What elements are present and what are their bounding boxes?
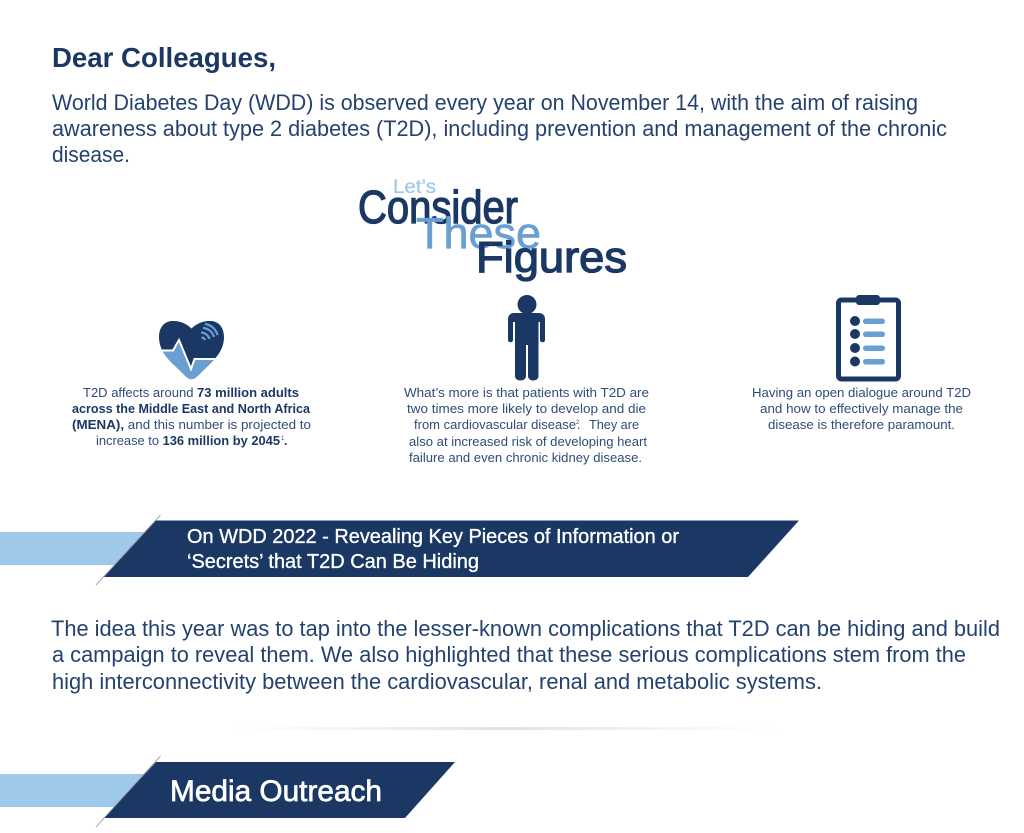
campaign paragraph: [51, 616, 1000, 694]
banner text: [187, 526, 679, 573]
banner text: On WDD 2022 - Revealing Key Pieces of Information or: [187, 526, 679, 548]
intro paragraph: awareness about type 2 diabetes (T2D), including prevention and management of the chronic: [52, 116, 947, 141]
campaign paragraph: high interconnectivity between the cardiovascular, renal and metabolic systems.: [52, 669, 822, 694]
column: open dialogue: [752, 295, 971, 432]
heading: Dear Colleagues: Dear Colleagues,: [52, 42, 276, 73]
text: T2D prevalence: 1: [281, 436, 285, 442]
text: T2D prevalence: (MENA), and this number is projected to: [72, 418, 311, 432]
column: cardiovascular risk: [404, 295, 649, 465]
text: cardiovascular risk: failure and even chronic kidney disease.: [409, 451, 642, 465]
banner text: ‘Secrets’ that T2D Can Be Hiding: [187, 551, 479, 573]
title: Let's Consider These Figures: Figures: [476, 233, 627, 282]
text: open dialogue: [752, 386, 971, 432]
intro paragraph: World Diabetes Day (WDD) is observed every year on November 14, with the aim of raising: [52, 90, 918, 115]
banner text: Media Outreach: [170, 775, 382, 808]
text: T2D prevalence: T2D affects around 73 million adults: [83, 386, 299, 400]
icon: heart with pulse: [159, 321, 224, 380]
text: cardiovascular risk: 2: [576, 420, 580, 426]
banner: Media Outreach: [0, 756, 455, 827]
text: T2D prevalence: across the Middle East and North Africa: [72, 402, 311, 416]
text: cardiovascular risk: [404, 386, 649, 465]
text: cardiovascular risk: They are: [589, 418, 639, 432]
text: cardiovascular risk: also at increased risk of developing heart: [409, 435, 648, 449]
text: open dialogue: Having an open dialogue around T2D: [752, 386, 971, 400]
text: T2D prevalence: .: [284, 434, 287, 448]
campaign paragraph: The idea this year was to tap into the lesser-known complications that T2D can be hiding and build: [51, 616, 1000, 641]
icon: clipboard: [838, 295, 898, 379]
text: open dialogue: disease is therefore paramount.: [768, 418, 955, 432]
text: T2D prevalence: [72, 386, 311, 448]
intro paragraph: disease.: [52, 142, 130, 167]
title: Let's Consider These Figures: [358, 177, 627, 282]
text: cardiovascular risk: from cardiovascular disease: [414, 418, 576, 432]
icon: person: [508, 295, 545, 380]
text: open dialogue: and how to effectively manage the: [760, 402, 963, 416]
text: T2D prevalence: increase to 136 million by 2045: [96, 434, 280, 448]
intro paragraph: [52, 90, 947, 167]
title: Let's Consider These Figures: Consider: [358, 181, 518, 233]
text: cardiovascular risk: two times more likely to develop and die: [407, 402, 646, 416]
title: Let's Consider These Figures: These: [416, 209, 541, 258]
title: Let's Consider These Figures: Let’s: [393, 177, 436, 198]
text: cardiovascular risk: What’s more is that patients with T2D are: [404, 386, 649, 400]
text: cardiovascular risk: .: [577, 418, 580, 432]
column: T2D prevalence: [72, 318, 311, 448]
campaign paragraph: a campaign to reveal them. We also highlighted that these serious complications stem from the: [52, 642, 966, 667]
banner: WDD 2022: [0, 515, 799, 585]
